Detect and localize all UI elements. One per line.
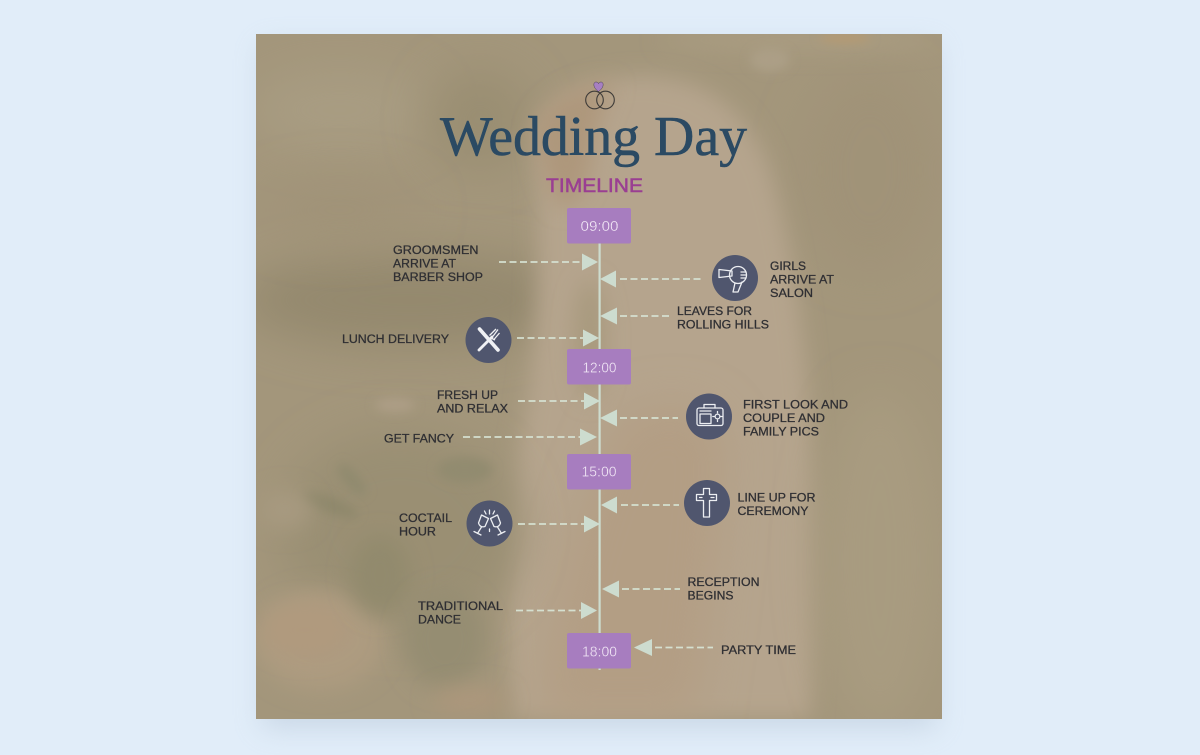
time box 09:00 (567, 208, 631, 244)
event: lunch delivery: LUNCH DELIVERY (342, 332, 449, 346)
title: Wedding Day (440, 106, 747, 168)
time box 09:00: 09:00 (580, 218, 618, 235)
icon: clinking glasses (466, 500, 512, 546)
event: groomsmen arrive (393, 243, 598, 284)
event: reception begins: BEGINS (688, 588, 734, 602)
event: fresh up and relax (437, 388, 600, 416)
event: girls arrive at salon (600, 255, 834, 301)
event: leaves for rolling hills: LEAVES FOR (677, 304, 752, 318)
event: lunch delivery (342, 317, 599, 363)
time box 15:00 (567, 454, 631, 490)
event: reception begins (602, 575, 760, 602)
event: fresh up and relax: AND RELAX (437, 402, 508, 416)
subtitle: TIMELINE (546, 175, 643, 197)
event: traditional dance: DANCE (418, 612, 461, 626)
time box 18:00: 18:00 (582, 644, 617, 660)
timeline axis (598, 240, 601, 670)
event: line up for ceremony: CEREMONY (738, 504, 808, 518)
event: cocktail hour: HOUR (399, 524, 436, 538)
icon: rings with heart (586, 82, 614, 109)
event: groomsmen arrive: GROOMSMEN (393, 243, 478, 257)
event: leaves for rolling hills: ROLLING HILLS (677, 318, 769, 332)
event: line up for ceremony (601, 480, 816, 526)
time box 15:00: 15:00 (582, 464, 616, 480)
event: cocktail hour (399, 500, 600, 546)
event: line up for ceremony: LINE UP FOR (738, 490, 816, 504)
event: cocktail hour: COCTAIL (399, 511, 452, 525)
icon: camera (686, 394, 732, 440)
event: first look: FAMILY PICS (743, 424, 819, 438)
time box 12:00 (567, 349, 631, 384)
event: get fancy: GET FANCY (384, 432, 454, 446)
icon: hair dryer (712, 255, 758, 301)
event: girls arrive at salon: GIRLS (770, 259, 806, 273)
icon: fork and knife (466, 317, 512, 363)
event: girls arrive at salon: ARRIVE AT (770, 272, 834, 286)
event: first look: FIRST LOOK AND (743, 398, 848, 412)
card shadow (262, 46, 936, 728)
icon: cross (684, 480, 730, 526)
event: traditional dance: TRADITIONAL (418, 599, 503, 613)
event: party time (634, 639, 796, 657)
event: leaves for rolling hills (600, 304, 769, 332)
event: party time: PARTY TIME (721, 643, 796, 657)
event: groomsmen arrive: ARRIVE AT (393, 256, 456, 270)
event: girls arrive at salon: SALON (770, 286, 813, 300)
panel: blurred wedding photo background (240, 30, 942, 730)
event: first look: COUPLE AND (743, 411, 825, 425)
event: fresh up and relax: FRESH UP (437, 388, 498, 402)
event: reception begins: RECEPTION (688, 575, 760, 589)
event: groomsmen arrive: BARBER SHOP (393, 270, 483, 284)
time box 18:00 (567, 633, 631, 668)
event: traditional dance (418, 599, 597, 626)
event: first look (600, 394, 848, 440)
event: get fancy (384, 428, 597, 446)
time box 12:00: 12:00 (582, 360, 616, 376)
